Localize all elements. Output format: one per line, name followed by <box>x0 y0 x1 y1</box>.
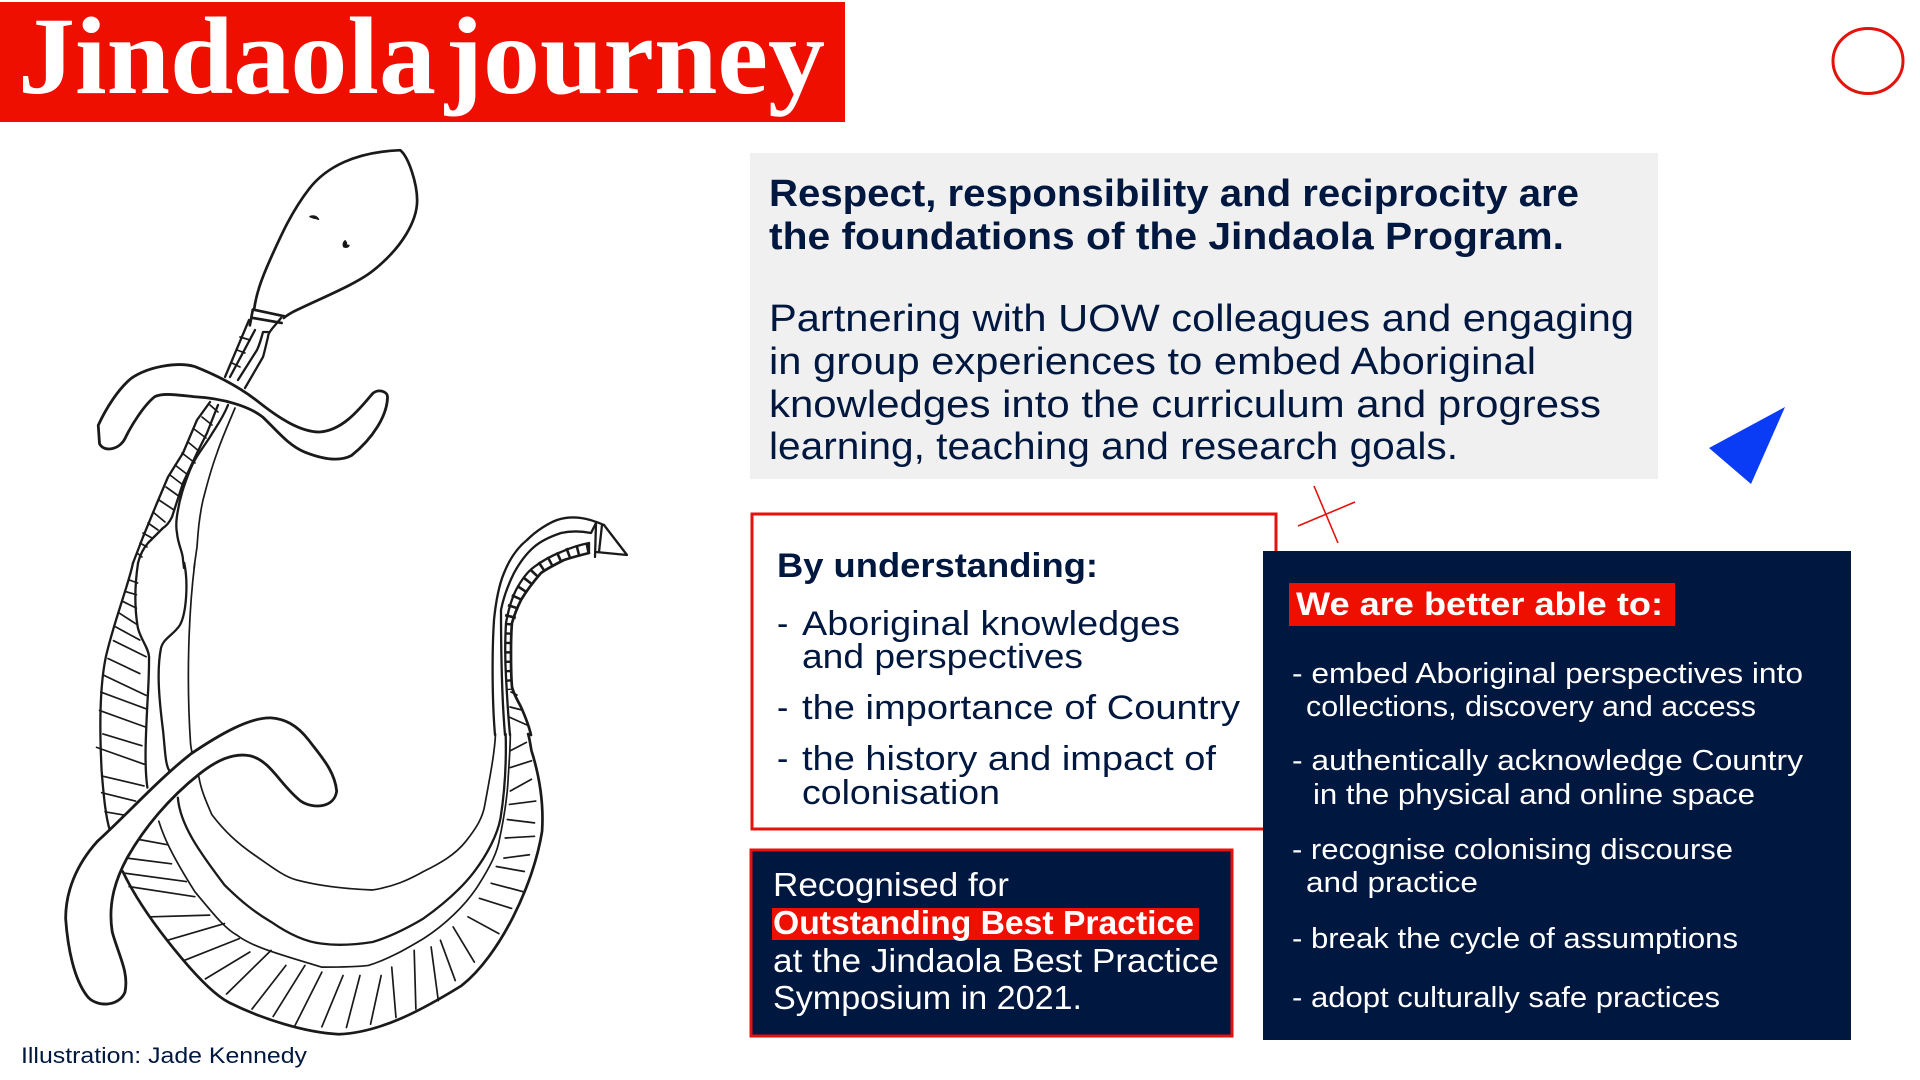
text block: partnering: knowledges into the curriculum and progress <box>769 384 1601 426</box>
text block: partnering: Partnering with UOW colleagues and engaging <box>769 298 1634 340</box>
list: understanding items: and perspectives <box>802 638 1083 676</box>
panel: recognised for best practice <box>751 850 1232 1036</box>
tail tip and hatching <box>493 517 627 735</box>
icon: red circle outline <box>1833 28 1903 94</box>
list: understanding items: colonisation <box>802 774 1000 812</box>
illustration: goanna line drawing <box>66 150 627 1034</box>
panel: recognised for best practice: Symposium in 2021. <box>773 979 1082 1016</box>
head <box>250 150 417 325</box>
list: abilities: - embed Aboriginal perspectives into <box>1292 658 1803 690</box>
panel: recognised for best practice: Recognised for <box>773 866 1009 903</box>
list: abilities: collections, discovery and access <box>1306 691 1756 723</box>
icon: blue triangle <box>1709 407 1785 484</box>
panel: we are better able to <box>1263 551 1851 1040</box>
list: abilities: and practice <box>1306 867 1478 899</box>
heading: we are better able to: We are better able to: <box>1296 586 1663 622</box>
text block: partnering <box>769 298 1634 468</box>
list: abilities: - adopt culturally safe practices <box>1292 982 1720 1014</box>
panel: program foundations <box>750 153 1658 479</box>
list: abilities <box>1292 658 1804 1014</box>
panel: by understanding <box>752 514 1276 829</box>
icon: red cross <box>1298 486 1355 543</box>
list: understanding items: - <box>777 689 788 727</box>
text block: partnering: learning, teaching and research goals. <box>769 426 1458 468</box>
list: understanding items <box>777 605 1240 812</box>
heading: by understanding: By understanding: <box>777 547 1098 585</box>
title banner <box>0 0 845 122</box>
lower limb <box>66 718 337 1004</box>
panel: recognised for best practice: at the Jindaola Best Practice <box>773 942 1219 979</box>
heading: foundations: the foundations of the Jindaola Program. <box>769 216 1564 258</box>
neck and upper body lines <box>133 318 281 568</box>
heading: foundations: Respect, responsibility and reciprocity are <box>769 173 1579 215</box>
list: abilities: - break the cycle of assumptions <box>1292 923 1738 955</box>
list: understanding items: the importance of Country <box>802 689 1240 727</box>
panel: recognised for best practice: Outstanding Best Practice <box>773 904 1194 941</box>
heading: foundations <box>769 173 1579 258</box>
upper limb <box>98 365 388 459</box>
text block: partnering: in group experiences to embed Aboriginal <box>769 341 1536 383</box>
list: understanding items: - <box>777 605 788 643</box>
list: abilities: in the physical and online space <box>1313 779 1755 811</box>
list: understanding items: - <box>777 740 788 778</box>
list: abilities: - recognise colonising discourse <box>1292 834 1733 866</box>
list: abilities: - authentically acknowledge Country <box>1292 745 1804 777</box>
list: understanding items: Aboriginal knowledges <box>802 605 1180 643</box>
list: understanding items: the history and impact of <box>802 740 1217 778</box>
illustration credit: Illustration: Jade Kennedy <box>21 1043 307 1068</box>
body and tail lower <box>97 563 542 1034</box>
